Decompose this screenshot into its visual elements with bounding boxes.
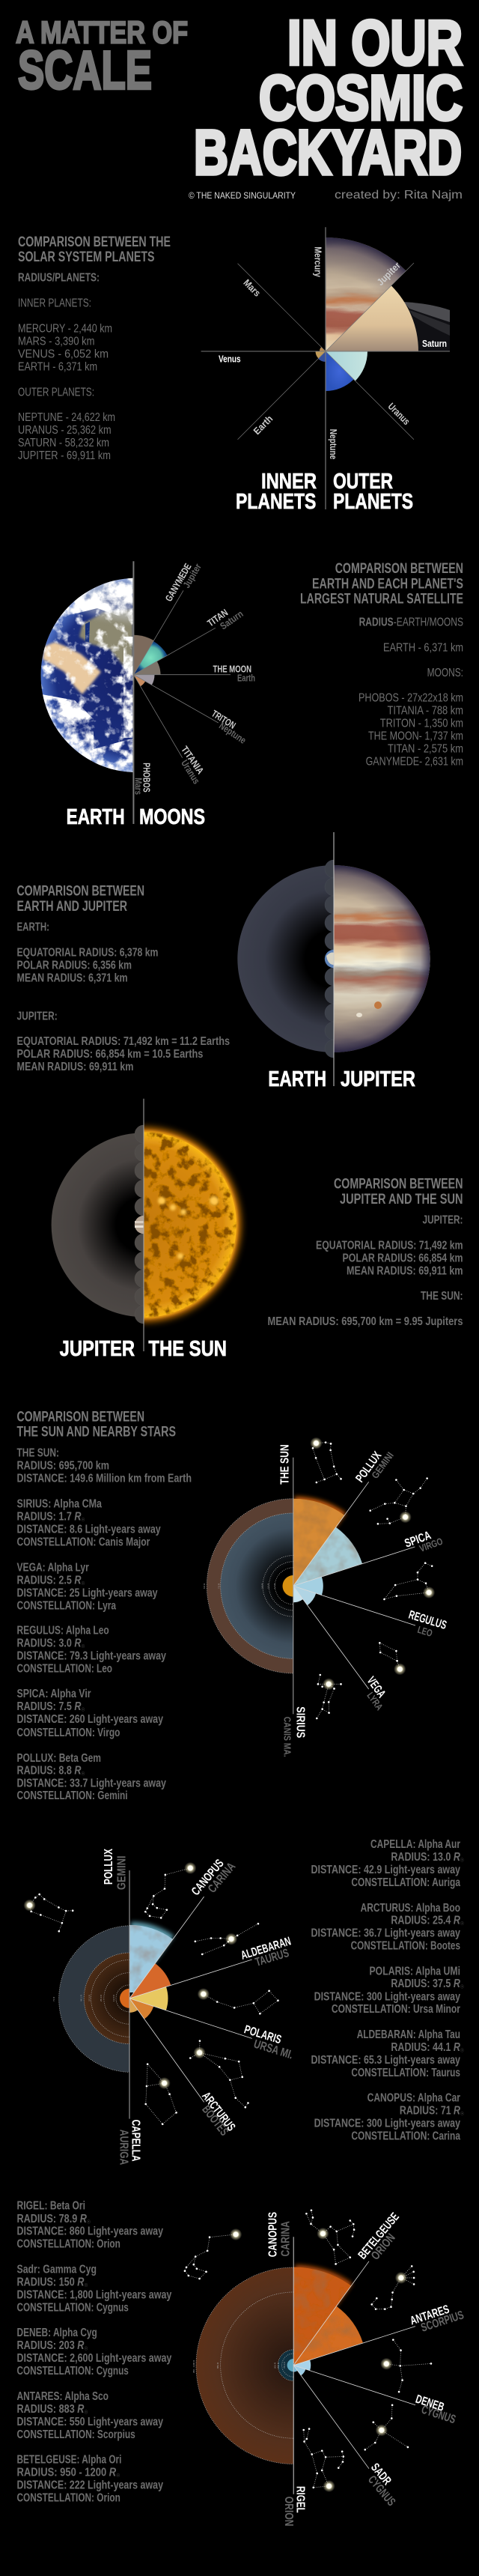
star labels: REGULUS [407, 1609, 448, 1632]
heading [16, 1408, 176, 1440]
planet labels [219, 246, 447, 459]
earth scale half disc [237, 865, 334, 1052]
copyright credit: © THE NAKED SINGULARITY [189, 190, 296, 201]
moon labels: Saturn [218, 608, 245, 631]
heading [300, 560, 463, 607]
star labels: ARCTURUS [199, 2090, 237, 2134]
planet labels: Venus [219, 353, 241, 364]
constellation: ursa minor [198, 1988, 278, 2013]
radius list: INNER PLANETS: [18, 297, 91, 309]
star labels: POLLUX [103, 1849, 115, 1885]
scale labels [192, 2360, 286, 2373]
star labels: RIGEL [294, 2486, 307, 2513]
star facts: RADIUS: 695,700 km [16, 1460, 109, 1473]
divider [333, 832, 335, 1086]
radii list: MEAN RADIUS: 6,371 km [16, 972, 128, 984]
star labels: SADR [368, 2461, 394, 2488]
star labels: VIRGO [418, 1536, 444, 1554]
panel: giant stars text: RADIUS: 13.0 R [391, 1851, 465, 1864]
planet labels: Earth [251, 413, 275, 437]
star labels: POLLUX [353, 1449, 384, 1485]
axis [132, 561, 134, 824]
star labels: URSA MI. [252, 2038, 294, 2062]
panel: supergiant stars text: DISTANCE: 2,600 Light-years away [16, 2352, 172, 2365]
radii list: THE SUN: [421, 1290, 463, 1303]
sirius sector [293, 1586, 303, 1602]
panel: supergiant stars text: RADIUS: 950 - 1200 R [16, 2466, 124, 2479]
scale labels: 37.5 R [88, 1994, 91, 2001]
constellation: cygnus lower [365, 2405, 408, 2449]
star facts: SIRIUS: Alpha CMa [16, 1498, 102, 1511]
panel: supergiant stars text: RIGEL: Beta Ori [16, 2200, 85, 2213]
jupiter half disc [334, 865, 430, 1052]
star facts: POLLUX: Beta Gem [16, 1752, 101, 1765]
panel: supergiant stars text: RADIUS: 150 R [16, 2276, 88, 2289]
radius list: EARTH - 6,371 km [18, 360, 97, 373]
star facts: RADIUS: 1.7 R [16, 1511, 85, 1524]
panel: supergiant stars text: CONSTELLATION: Cygnus [16, 2302, 129, 2315]
earth and moons labels: EARTH [67, 805, 125, 829]
radius list: MERCURY - 2,440 km [18, 322, 112, 335]
betelgeuse scale half disc [196, 2267, 293, 2464]
earth and jupiter labels: EARTH [268, 1067, 326, 1091]
jupiter scale half disc [52, 1133, 144, 1317]
panel: giant stars text: RADIUS: 25.4 R [391, 1915, 465, 1927]
earth and jupiter labels: JUPITER [341, 1067, 415, 1091]
canopus sector [129, 1922, 174, 1998]
heading: EARTH AND JUPITER [16, 898, 127, 915]
panel: supergiant stars text: ☉ [84, 2283, 88, 2288]
panel: supergiant stars text: DISTANCE: 860 Light-years away [16, 2225, 163, 2238]
scale labels: 150 R [277, 2362, 280, 2369]
panel: giant stars text: RADIUS: 71 R [400, 2105, 464, 2117]
axis [293, 2237, 294, 2494]
star labels: CYGNUS [420, 2404, 457, 2426]
constellations [23, 1862, 278, 2124]
panel: supergiant stars text: CONSTELLATION: Orion [16, 2491, 120, 2504]
constellation: auriga [146, 2064, 177, 2124]
chart: jupiter versus the sun [47, 1099, 240, 1361]
radius list: NEPTUNE - 24,622 km [18, 411, 115, 424]
star facts: THE SUN: [16, 1447, 59, 1460]
heading: COMPARISON BETWEEN [16, 1408, 144, 1425]
scale labels: 71 R [52, 1996, 55, 2001]
star facts: ☉ [81, 1644, 85, 1649]
jupiter and sun labels [60, 1337, 227, 1361]
panel: giant stars text: ☉ [460, 1858, 464, 1864]
planet labels: Neptune [328, 429, 339, 459]
canopus scale half disc [59, 1926, 129, 2072]
panel: supergiant stars text: BETELGEUSE: Alpha Ori [16, 2453, 121, 2466]
star labels: GEMINI [115, 1856, 128, 1890]
planet labels: Uranus [385, 401, 412, 427]
radius list: JUPITER - 69,911 km [18, 449, 111, 462]
star labels: ANTARES [409, 2303, 451, 2328]
leader lines [293, 2261, 415, 2469]
jupiter and sun labels: THE SUN [148, 1337, 227, 1361]
heading: COMPARISON BETWEEN THE [18, 234, 171, 250]
constellation: cygnus [380, 2340, 431, 2392]
earth and jupiter labels [268, 1067, 415, 1091]
panel: supergiant stars text: CONSTELLATION: Scorpius [16, 2428, 135, 2441]
panel: supergiant stars text: CONSTELLATION: Cygnus [16, 2365, 129, 2378]
constellation: lyra [379, 1643, 406, 1675]
inner and outer planets labels: PLANETS [236, 490, 316, 514]
star facts: RADIUS: 3.0 R [16, 1637, 85, 1650]
saturn sector [326, 285, 418, 351]
star facts [16, 1447, 192, 1802]
constellation: taurus [195, 1924, 258, 1954]
star labels: DENEB [414, 2393, 445, 2414]
heading [334, 1176, 463, 1207]
panel: supergiant stars text: ☉ [116, 2473, 120, 2479]
panel: jupiter and sun text [268, 1176, 463, 1328]
star labels: SIRIUS [294, 1706, 307, 1739]
sun half disc [120, 1989, 129, 2008]
scale labels: 13.0 R [112, 1994, 115, 2001]
star labels [266, 2210, 466, 2527]
moon labels: TITAN [205, 607, 230, 628]
radius list: RADIUS/PLANETS: [18, 272, 100, 285]
star labels: CANOPUS [189, 1857, 227, 1898]
panel: supergiant stars text: ☉ [84, 2410, 88, 2415]
radius list: MARS - 3,390 km [18, 335, 94, 348]
panel: giant stars text: ☉ [460, 1921, 464, 1927]
star labels: GEMINI [369, 1450, 396, 1481]
pollux sector [293, 1497, 346, 1586]
betelgeuse sector [293, 2265, 353, 2366]
panel: earth and moons text [300, 560, 463, 769]
panel: giant stars text: ☉ [460, 2048, 464, 2053]
chart: planets radial comparison [201, 227, 450, 514]
inner and outer planets labels: PLANETS [333, 490, 413, 514]
scale labels: 950 - 1200 R [192, 2360, 195, 2373]
rigel sector [293, 2366, 298, 2372]
star facts: ☉ [81, 1772, 85, 1777]
constellation: virgo [370, 1479, 427, 1524]
star facts: VEGA: Alpha Lyr [16, 1561, 89, 1574]
chart: supergiant stars [185, 2210, 466, 2527]
radius list [359, 616, 463, 769]
star labels: ALDEBARAN [240, 1935, 293, 1963]
radius list: URANUS - 25,362 km [18, 424, 112, 437]
axis lines [201, 227, 450, 509]
earth and moons labels [67, 805, 205, 829]
inner and outer planets labels: OUTER [333, 470, 393, 494]
star facts: CONSTELLATION: Virgo [16, 1727, 120, 1739]
scale labels: 883 R [216, 2362, 219, 2369]
star facts: ☉ [81, 1708, 85, 1712]
scale labels: 7.5 R [217, 1583, 220, 1589]
aldebaran sector [129, 1963, 171, 1998]
inner and outer planets labels [236, 470, 413, 514]
radius list: TITAN - 2,575 km [388, 743, 463, 756]
ganymede sector [133, 635, 154, 675]
star facts: DISTANCE: 149.6 Million km from Earth [16, 1473, 192, 1485]
constellation: leo [384, 1563, 435, 1599]
radii list: POLAR RADIUS: 66,854 km = 10.5 Earths [16, 1048, 203, 1061]
star facts: SPICA: Alpha Vir [16, 1688, 91, 1700]
star labels: BETELGEUSE [356, 2210, 402, 2262]
divider [143, 1099, 144, 1351]
star facts: REGULUS: Alpha Leo [16, 1625, 109, 1637]
radius list: MOONS: [427, 667, 463, 679]
vega sector [293, 1586, 316, 1605]
subtitle: a matter of scale: A MATTER OF [16, 15, 188, 50]
panel: giant stars text: ☉ [460, 1985, 464, 1989]
star labels: POLARIS [242, 2023, 283, 2046]
star labels: SPICA [403, 1529, 433, 1551]
constellation: orion [306, 2210, 354, 2264]
header [16, 7, 463, 201]
star labels: CANIS MA. [282, 1717, 293, 1757]
earth and moons labels: MOONS [139, 805, 205, 829]
radius list [18, 272, 115, 462]
star labels: ORION [282, 2497, 295, 2527]
star labels [279, 1444, 448, 1757]
moon labels: TRITON [210, 708, 238, 731]
stacked earth diameters [325, 860, 334, 1058]
constellations [310, 1437, 435, 1718]
radii list [268, 1214, 463, 1328]
constellation: bootes [190, 2041, 248, 2107]
panel: supergiant stars text: DENEB: Alpha Cyg [16, 2327, 97, 2339]
moon labels: TITANIA [179, 744, 207, 777]
constellation: gemini [310, 1437, 341, 1482]
star facts: DISTANCE: 8.6 Light-years away [16, 1524, 161, 1536]
sadr sector [293, 2366, 305, 2375]
heading: SOLAR SYSTEM PLANETS [18, 249, 154, 265]
radii list: EQUATORIAL RADIUS: 6,378 km [16, 946, 158, 959]
radius list: TRITON - 1,350 km [380, 718, 463, 730]
inner planet sectors [316, 347, 326, 362]
panel: supergiant stars text: ANTARES: Alpha Sco [16, 2390, 109, 2403]
star labels: CANOPUS [266, 2212, 279, 2257]
axis [293, 1458, 294, 1714]
scale labels: 44.1 R [79, 1994, 82, 2001]
jupiter sector [326, 237, 406, 351]
neptune sector [326, 351, 353, 391]
star labels: THE SUN [279, 1444, 292, 1485]
constellation: orion lower [304, 2429, 344, 2492]
subtitle: a matter of scale [16, 15, 188, 100]
heading [16, 883, 144, 915]
earth half disc [40, 578, 133, 772]
sun half disc [282, 1575, 293, 1597]
moon labels: PHOBOS [141, 763, 152, 793]
planet labels: Mars [241, 277, 263, 299]
panel: supergiant stars text: DISTANCE: 1,800 Light-years away [16, 2289, 172, 2302]
star facts: DISTANCE: 25 Light-years away [16, 1586, 158, 1599]
spica scale half disc [221, 1513, 293, 1658]
saturn rings [403, 302, 450, 351]
moon labels: GANYMEDE [163, 561, 194, 604]
inner and outer planets labels: INNER [261, 470, 317, 494]
star labels: LYRA [364, 1690, 385, 1712]
constellation: scorpius [372, 2266, 414, 2309]
star labels: CAPELLA [129, 2120, 142, 2162]
star labels: CYGNUS [365, 2473, 397, 2509]
scale labels: 1.7 R [273, 1583, 276, 1589]
sun half disc [144, 1122, 247, 1327]
radius list: SATURN - 58,232 km [18, 437, 109, 449]
rigel half disc [287, 2359, 293, 2372]
constellation: canis major [317, 1675, 341, 1718]
star labels: AURIGA [117, 2130, 129, 2166]
panel: supergiant stars text: Sadr: Gamma Cyg [16, 2264, 97, 2276]
moon labels: Neptune [217, 720, 248, 746]
panel: giant stars text: RADIUS: 44.1 R [391, 2041, 465, 2054]
radii list: EQUATORIAL RADIUS: 71,492 km = 11.2 Earths [16, 1035, 230, 1048]
jupiter and sun labels: JUPITER [60, 1337, 135, 1361]
triton sector [133, 675, 154, 685]
scale labels: 25.4 R [100, 1994, 103, 2001]
star facts: DISTANCE: 79.3 Light-years away [16, 1650, 166, 1663]
star facts: CONSTELLATION: Lyra [16, 1599, 116, 1612]
radius list: OUTER PLANETS: [18, 386, 94, 398]
radius list: EARTH - 6,371 km [383, 641, 463, 654]
star facts: CONSTELLATION: Canis Major [16, 1536, 150, 1549]
scale labels: 78.9 R [283, 2361, 286, 2369]
star facts: ☉ [81, 1518, 85, 1523]
constellation: gemini [23, 1894, 73, 1931]
star labels: TAURUS [254, 1947, 290, 1969]
constellations [185, 2210, 431, 2492]
chart: giant stars [23, 1849, 294, 2166]
antares sector [293, 2306, 363, 2366]
scale labels: 203 R [274, 2362, 277, 2369]
panel: giant stars text [311, 1838, 464, 2142]
chart: sun and nearby stars [203, 1437, 448, 1757]
planet labels: Mercury [312, 246, 323, 278]
arcturus sector [129, 1998, 153, 2019]
star facts: ☉ [81, 1581, 85, 1586]
deneb sector [293, 2360, 311, 2371]
planet labels: Saturn [422, 338, 447, 349]
constellation: carina [145, 1862, 196, 1918]
scale labels: 2.5 R [266, 1583, 269, 1589]
radii list [16, 921, 230, 1073]
heading: COMPARISON BETWEEN [16, 883, 144, 900]
panel: giant stars text: RADIUS: 37.5 R [391, 1978, 465, 1990]
radii list: JUPITER: [422, 1214, 463, 1227]
star labels: VEGA [364, 1675, 388, 1700]
panel: supergiant stars text: DISTANCE: 550 Light-years away [16, 2416, 163, 2428]
star facts: DISTANCE: 33.7 Light-years away [16, 1777, 166, 1789]
moon labels [132, 561, 255, 795]
star facts: CONSTELLATION: Leo [16, 1663, 112, 1676]
star labels [103, 1849, 294, 2166]
title: in our cosmic backyard [194, 7, 463, 188]
moon labels: Mars [132, 778, 144, 795]
chart: earth and moons [30, 561, 255, 829]
pollux scale half disc [207, 1499, 293, 1673]
scale labels [52, 1994, 115, 2001]
panel: sun and nearby stars text [16, 1408, 192, 1802]
panel: supergiant stars text: CONSTELLATION: Orion [16, 2238, 120, 2251]
panel: supergiant stars text: RADIUS: 883 R [16, 2403, 88, 2416]
titan sector [133, 641, 168, 675]
moon labels: Uranus [179, 758, 202, 786]
star labels: BOOTES [199, 2103, 231, 2139]
heading: THE SUN AND NEARBY STARS [16, 1424, 176, 1440]
panel: supergiant stars text: ☉ [87, 2220, 91, 2225]
star labels: LEO [416, 1624, 434, 1639]
canopus scale half disc [278, 2350, 293, 2380]
panel: supergiant stars text: RADIUS: 78.9 R [16, 2213, 91, 2225]
star labels: ORION [369, 2231, 398, 2263]
radius list: TITANIA - 788 km [388, 705, 463, 718]
planet labels: Jupiter [375, 260, 403, 288]
panel: supergiant stars text [16, 2200, 172, 2504]
axis [129, 1870, 130, 2119]
star facts: DISTANCE: 260 Light-years away [16, 1713, 163, 1726]
star facts: CONSTELLATION: Gemini [16, 1789, 128, 1802]
star facts: RADIUS: 7.5 R [16, 1700, 85, 1713]
radii list: POLAR RADIUS: 6,356 km [16, 959, 132, 972]
panel: earth and jupiter text [16, 883, 230, 1073]
star facts: RADIUS: 2.5 R [16, 1574, 85, 1586]
titania sector [133, 675, 145, 686]
chart: earth versus jupiter [237, 832, 439, 1091]
scale labels: 3.0 R [260, 1583, 263, 1589]
radii list: MEAN RADIUS: 69,911 km [16, 1061, 133, 1073]
polaris sector [129, 1986, 168, 2010]
moon labels: THE MOON [213, 664, 251, 675]
moon labels: Jupiter [180, 562, 204, 590]
leader lines [129, 1897, 252, 2102]
stacked jupiter diameters [135, 1125, 144, 1324]
star labels: CARINA [280, 2221, 292, 2256]
the moon sector [133, 661, 160, 675]
scale labels [203, 1583, 276, 1589]
regulus sector [293, 1577, 323, 1595]
panel: supergiant stars text: RADIUS: 203 R [16, 2339, 88, 2352]
radius list: VENUS - 6,052 km [18, 348, 109, 360]
panel: giant stars text: ☉ [460, 2112, 464, 2117]
scale rings [59, 1926, 129, 2072]
scale rings [196, 2267, 293, 2464]
leader lines [293, 1482, 415, 1689]
panel: solar system planets text [18, 234, 171, 462]
radii list: JUPITER: [16, 1010, 58, 1022]
capella sector [129, 1998, 138, 2013]
scale rings [207, 1499, 293, 1673]
panel: supergiant stars text: DISTANCE: 222 Light-years away [16, 2479, 163, 2491]
uranus sector [326, 351, 367, 381]
radii list: EARTH: [16, 921, 49, 933]
star labels: CARINA [206, 1860, 238, 1896]
panel: supergiant stars text: ☉ [84, 2346, 88, 2352]
heading [18, 234, 171, 265]
subtitle: a matter of scale: SCALE [18, 40, 152, 100]
constellation: carina [185, 2228, 242, 2279]
aldebaran scale half disc [84, 1953, 129, 2044]
star facts: RADIUS: 8.8 R [16, 1765, 85, 1778]
author credit: created by: Rita Najm [335, 189, 463, 201]
scale labels: 8.8 R [203, 1583, 206, 1589]
leader lines [133, 590, 231, 758]
moon labels: Earth [237, 672, 255, 683]
spica sector [293, 1527, 362, 1586]
